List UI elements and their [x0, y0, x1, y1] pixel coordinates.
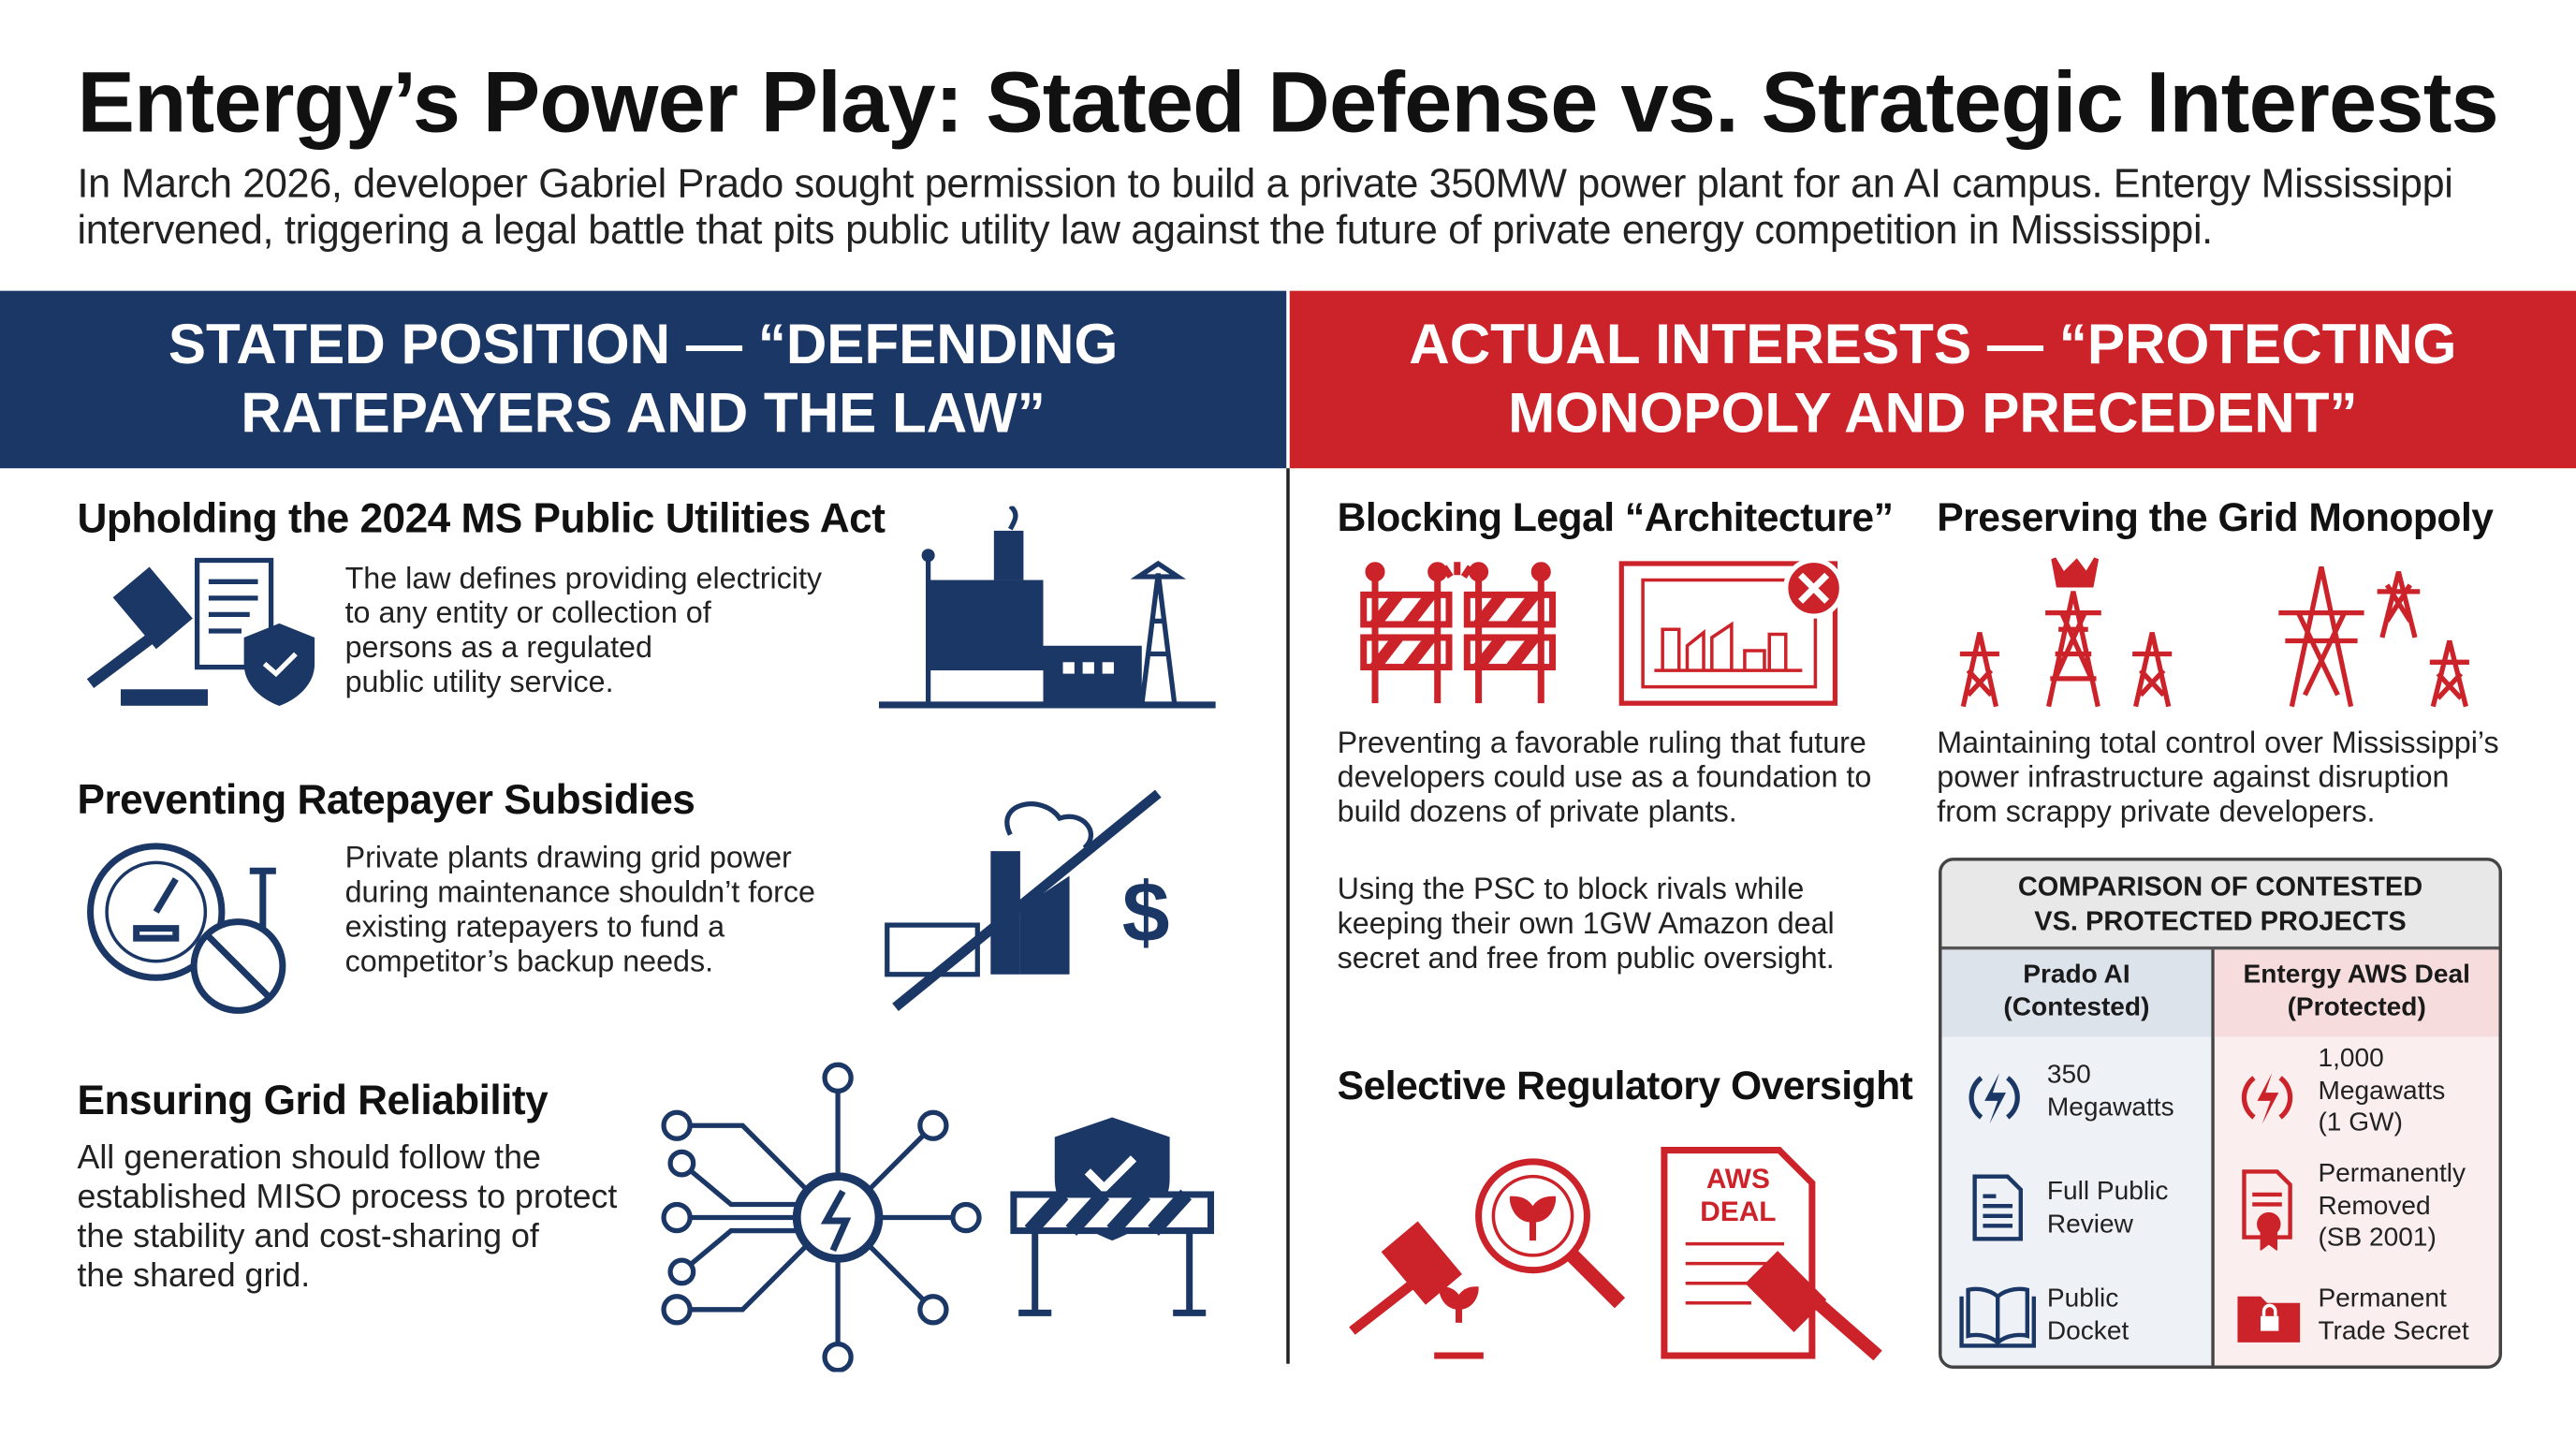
header: actual interests: MONOPOLY AND PRECEDENT”: [1508, 383, 2358, 446]
text: established MISO process to protect: [77, 1180, 617, 1216]
subtitle: In March 2026, developer Gabriel Prado sought permission to build a private 350MW power plant for an AI campus. Entergy Mississippi: [77, 163, 2453, 207]
icon: barricades: [1360, 562, 1556, 704]
column: Entergy AWS: [2215, 949, 2499, 1365]
icon: factory with dollar: $: [1122, 865, 1169, 961]
panel: preventing subsidies: [77, 777, 1169, 1014]
icon: gavel magnifier plant: [1349, 1158, 1625, 1359]
icon: AWS deal document: AWS: [1706, 1164, 1770, 1195]
row: trade secret: Trade Secret: [2318, 1317, 2469, 1345]
text: the stability and cost-sharing of: [77, 1219, 539, 1255]
text: during maintenance shouldn’t force: [345, 874, 815, 909]
icon: shield barrier: [1010, 1118, 1214, 1316]
header: actual interests: ACTUAL INTERESTS — “PROTECTING: [1409, 314, 2456, 376]
row: 1000 MW: 1,000: [2318, 1045, 2384, 1073]
text: developers could use as a foundation to: [1338, 759, 1871, 794]
text: using the PSC: [1338, 871, 1835, 975]
icon: meter with plug: [87, 843, 286, 1014]
text: All generation should follow the: [77, 1140, 541, 1177]
header: stated position: [0, 291, 1286, 468]
text: competitor’s backup needs.: [345, 943, 713, 977]
row: 350 MW: 350: [2047, 1062, 2091, 1090]
text: [1937, 725, 2499, 829]
panel: grid reliability: [77, 1062, 1214, 1372]
column: Prado AI: Prado AI: [2023, 961, 2130, 990]
header: stated position: STATED POSITION — “DEFENDING: [168, 314, 1118, 376]
column: Prado AI: [1942, 949, 2211, 1365]
text: using the PSC: keeping their own 1GW Amazon deal: [1338, 905, 1835, 940]
comparison table: [1939, 858, 2502, 1369]
table header: [1942, 861, 2499, 949]
subtitle: intervened, triggering a legal battle that pits public utility law against the future of private energy competition in Mississippi.: [77, 209, 2213, 253]
text: Private plants drawing grid power: [345, 840, 792, 874]
text: [345, 840, 815, 977]
icon: AWS deal document: [1661, 1147, 1882, 1361]
text: to any entity or collection of: [345, 594, 711, 629]
row: 350 MW: [1969, 1062, 2174, 1123]
column: Entergy AWS: (Protected): [2288, 994, 2426, 1022]
icon: factory with dollar: [885, 790, 1169, 1011]
text: existing ratepayers to fund a: [345, 909, 724, 943]
heading: Selective Regulatory Oversight: [1338, 1064, 1912, 1109]
icon: blueprint with X: [1619, 561, 1839, 706]
title: Entergy’s Power Play: Stated Defense vs. Strategic Interests: [77, 54, 2498, 151]
heading: Ensuring Grid Reliability: [77, 1078, 548, 1123]
panel: blocking legal architecture: [1338, 496, 1893, 829]
row: 350 MW: Megawatts: [2047, 1093, 2174, 1122]
row: removed: Removed: [2318, 1192, 2431, 1220]
text: Maintaining total control over Mississippi’s: [1937, 725, 2499, 759]
text: from scrappy private developers.: [1937, 794, 2375, 829]
header: stated position: RATEPAYERS AND THE LAW”: [241, 383, 1046, 446]
row: 1000 MW: Megawatts: [2318, 1077, 2445, 1105]
subtitle: [77, 163, 2453, 253]
header: actual interests: [1290, 291, 2576, 468]
text: build dozens of private plants.: [1338, 794, 1737, 829]
row: removed: Permanently: [2318, 1160, 2466, 1188]
text: public utility service.: [345, 664, 614, 698]
text: using the PSC: secret and free from public oversight.: [1338, 940, 1835, 975]
text: Preventing a favorable ruling that future: [1338, 725, 1866, 759]
row: 1000 MW: [2241, 1045, 2445, 1137]
icon: gavel law shield: [86, 558, 315, 706]
heading: Preserving the Grid Monopoly: [1937, 496, 2493, 540]
text: using the PSC: Using the PSC to block rivals while: [1338, 871, 1804, 905]
heading: Upholding the 2024 MS Public Utilities Act: [77, 496, 885, 542]
row: trade secret: [2237, 1284, 2469, 1345]
icon: network hub: [661, 1062, 982, 1372]
row: public docket: Docket: [2047, 1317, 2129, 1345]
icon: AWS deal document: DEAL: [1700, 1196, 1776, 1227]
row: public review: Full Public: [2047, 1178, 2168, 1206]
text: persons as a regulated: [345, 629, 652, 664]
text: [1338, 725, 1871, 829]
row: removed: [2242, 1160, 2466, 1252]
panel: selective oversight: [1338, 1064, 1913, 1361]
text: power infrastructure against disruption: [1937, 759, 2449, 794]
row: trade secret: Permanent: [2318, 1284, 2447, 1313]
heading: Preventing Ratepayer Subsidies: [77, 777, 695, 823]
row: public docket: [1959, 1284, 2129, 1348]
column: Entergy AWS: Entergy AWS Deal: [2243, 961, 2470, 990]
row: public docket: Public: [2047, 1284, 2118, 1313]
text: [77, 1140, 618, 1295]
text: [345, 560, 822, 698]
column: Prado AI: (Contested): [2003, 994, 2149, 1022]
icon: power plant: [879, 506, 1216, 708]
text: The law defines providing electricity: [345, 560, 822, 594]
text: the shared grid.: [77, 1258, 310, 1295]
panel: preserving grid monopoly: [1937, 496, 2499, 829]
table header: VS. PROTECTED PROJECTS: [2034, 907, 2407, 936]
row: 1000 MW: (1 GW): [2318, 1109, 2403, 1137]
row: public review: [1972, 1174, 2168, 1241]
heading: Blocking Legal “Architecture”: [1338, 496, 1893, 540]
icon: towers with crown: [1960, 557, 2469, 708]
table header: COMPARISON OF CONTESTED: [2018, 873, 2422, 902]
panel: upholding act: [77, 496, 1216, 708]
row: public review: Review: [2047, 1211, 2133, 1238]
row: removed: (SB 2001): [2318, 1225, 2437, 1252]
